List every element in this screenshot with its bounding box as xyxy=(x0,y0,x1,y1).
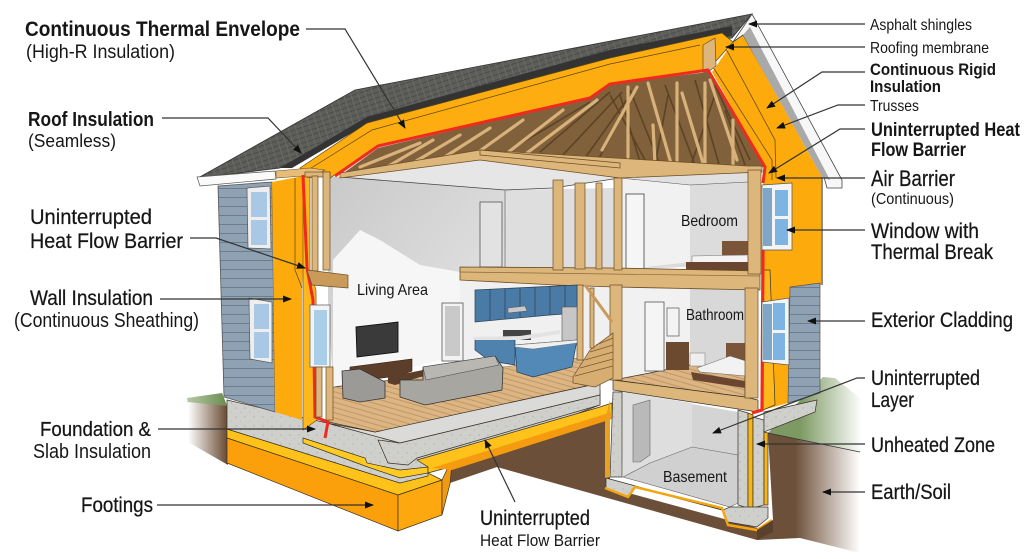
callout: Roof Insulation: (Seamless) xyxy=(28,131,116,151)
right wall window upper and red barrier xyxy=(752,183,792,413)
callout: Uninterrupted Heat Flow Barrier (left): Heat Flow Barrier xyxy=(30,230,183,253)
wood band at lower room floor xyxy=(613,380,758,412)
callout: Continuous Thermal Envelope: Continuous Thermal Envelope xyxy=(25,18,300,41)
callout: Continuous Rigid Insulation: Insulation xyxy=(870,77,941,96)
right exterior wall: orange insulation xyxy=(712,35,822,410)
callout: Roof Insulation: Roof Insulation xyxy=(28,109,154,131)
lower room wood floor xyxy=(614,365,745,397)
callout: Unheated Zone: Unheated Zone xyxy=(871,434,995,457)
bathroom xyxy=(614,285,746,397)
callout: Wall Insulation: (Continuous Sheathing) xyxy=(14,310,199,332)
red heat flow barrier: roof xyxy=(335,70,765,183)
callout: Uninterrupted Heat Flow Barrier (bottom): Uninterrupted xyxy=(480,507,590,530)
mezzanine floor and posts xyxy=(460,170,761,398)
callout: Uninterrupted Heat Flow Barrier (left): Uninterrupted xyxy=(30,206,152,229)
callout: Asphalt shingles: Asphalt shingles xyxy=(870,17,972,34)
stairs xyxy=(573,285,613,387)
right wall window lower xyxy=(762,298,789,365)
callout: Uninterrupted Heat Flow Barrier (left) xyxy=(30,206,305,268)
room label: Living Area: Living Area xyxy=(357,282,428,299)
callout: Wall Insulation xyxy=(14,287,291,332)
callout: Uninterrupted Heat Flow Barrier (bottom): Heat Flow Barrier xyxy=(480,531,600,550)
bottom chords xyxy=(340,38,762,178)
armchair xyxy=(342,369,385,402)
ground and soil xyxy=(187,377,862,553)
callout: Continuous Rigid Insulation: Continuous Rigid xyxy=(870,60,996,79)
callout: Air Barrier: (Continuous) xyxy=(871,191,954,208)
callout: Foundation and Slab Insulation: Slab Insulation xyxy=(33,441,151,463)
coffee table xyxy=(388,370,423,385)
room label: Bathroom: Bathroom xyxy=(686,307,744,324)
callout: Continuous Thermal Envelope xyxy=(25,18,405,128)
callout: Trusses: Trusses xyxy=(870,98,919,115)
callout: Uninterrupted Heat Flow Barrier (right) xyxy=(769,120,1021,173)
exterior cladding xyxy=(788,283,820,403)
kitchen island xyxy=(515,340,577,377)
callout: Uninterrupted Layer: Layer xyxy=(871,389,914,412)
bed in lower room xyxy=(691,343,746,388)
room label: Bedroom: Bedroom xyxy=(681,213,738,230)
callout: Uninterrupted Layer xyxy=(713,367,980,433)
callout: Continuous Thermal Envelope: (High-R Insulation) xyxy=(26,42,175,63)
range hood xyxy=(508,306,527,313)
lower left window xyxy=(249,298,272,363)
left exterior wall xyxy=(218,168,328,438)
callout: Footings: Footings xyxy=(81,494,153,517)
callout: Roofing membrane: Roofing membrane xyxy=(870,40,989,57)
upper left window xyxy=(247,186,271,249)
eave fascia xyxy=(197,171,276,186)
sofa xyxy=(400,356,503,405)
bedroom xyxy=(620,170,748,272)
fridge xyxy=(562,307,577,345)
callout: Wall Insulation: Wall Insulation xyxy=(30,287,153,310)
callout: Window with Thermal Break: Thermal Break xyxy=(871,241,993,264)
footing: large orange block xyxy=(227,429,452,531)
shingles xyxy=(198,14,752,178)
basement footing xyxy=(605,400,773,540)
room label: Basement: Basement xyxy=(663,469,727,486)
roof insulation band xyxy=(300,33,733,178)
living room contents xyxy=(342,282,577,405)
callout: Continuous Rigid Insulation xyxy=(767,60,996,108)
interior door xyxy=(442,303,463,361)
callout: Air Barrier xyxy=(777,166,955,208)
wall insulation xyxy=(272,176,303,420)
callout: Window with Thermal Break xyxy=(787,220,993,264)
callout: Uninterrupted Heat Flow Barrier (bottom) xyxy=(480,440,600,550)
callout: Earth/Soil xyxy=(823,481,951,504)
left wall framing and window xyxy=(305,172,348,420)
callout: Foundation and Slab Insulation: Foundation & xyxy=(40,419,152,441)
callout: Uninterrupted Heat Flow Barrier (right): Flow Barrier xyxy=(871,140,967,161)
floor of living area xyxy=(328,358,612,432)
callout: Trusses xyxy=(777,98,919,128)
slab and foundation concrete xyxy=(227,383,612,483)
living room walls and ceiling xyxy=(328,157,620,387)
attic trusses xyxy=(335,38,765,183)
callout: Uninterrupted Layer: Uninterrupted xyxy=(871,367,980,390)
media console xyxy=(350,359,412,380)
callout: Foundation and Slab Insulation xyxy=(33,419,315,463)
television xyxy=(356,322,398,357)
right gable rake xyxy=(733,14,842,188)
callout: Air Barrier: Air Barrier xyxy=(871,166,955,191)
callout: Roof Insulation xyxy=(28,109,301,153)
wood block at wall top xyxy=(276,168,325,178)
red barrier: wall xyxy=(303,175,328,438)
truss webs xyxy=(360,80,737,168)
basement xyxy=(605,392,817,540)
roof xyxy=(197,14,842,188)
callout: Window with Thermal Break: Window with xyxy=(871,220,979,243)
kitchen lower cabinets xyxy=(475,338,515,365)
callout: Earth/Soil: Earth/Soil xyxy=(871,481,951,504)
siding xyxy=(218,182,275,412)
kitchen upper cabinets xyxy=(475,285,577,322)
bedroom bed xyxy=(686,241,748,272)
